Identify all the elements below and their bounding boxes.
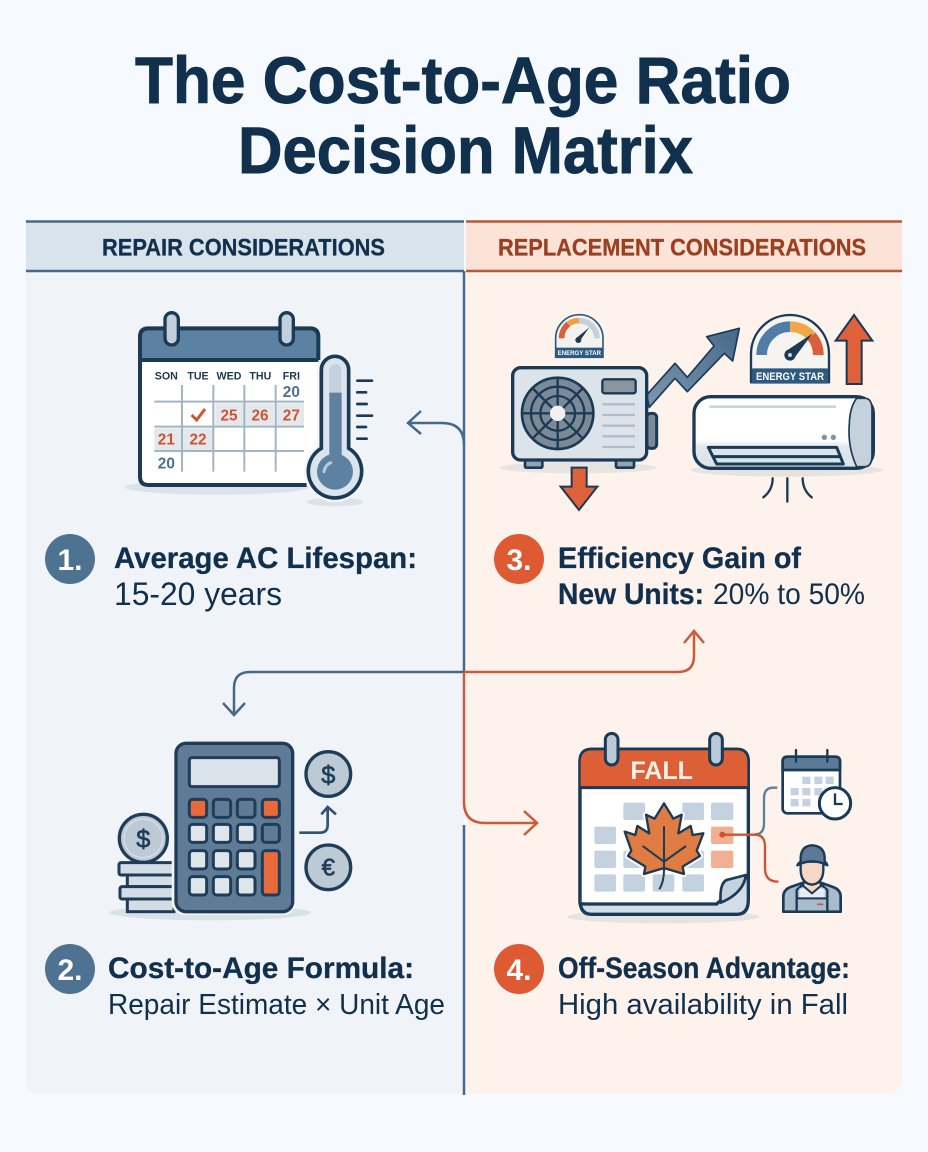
item 4: off-season advantage: 4. [506, 954, 532, 987]
icon: calculator and coins: $ [136, 825, 150, 853]
item 1: average AC lifespan: 1. [57, 544, 83, 577]
title: Decision Matrix [238, 113, 693, 187]
icon: calculator and coins: € [322, 855, 335, 882]
item 3: efficiency gain of new units: 20% to 50% [713, 578, 865, 611]
item 1: average AC lifespan: 15-20 years [114, 576, 282, 612]
panel: repair considerations [26, 222, 464, 1094]
item 3: efficiency gain of new units: 3. [506, 544, 532, 577]
arrow: to item 3 [464, 631, 704, 672]
icon: calendar and thermometer: THU [249, 371, 272, 383]
icon: AC units with efficiency gauges [500, 315, 883, 510]
icon: AC units with efficiency gauges: ENERGY STAR [558, 351, 602, 357]
icon: calendar and thermometer: WED [217, 371, 242, 383]
title: The Cost-to-Age Ratio [135, 43, 791, 117]
icon: calculator and coins: $ [321, 761, 335, 789]
item 2: cost-to-age formula: 2. [57, 954, 83, 987]
icon: calculator and coins [109, 740, 351, 920]
icon: calendar and thermometer: TUE [187, 371, 209, 383]
repair header [26, 222, 464, 271]
title [135, 43, 791, 187]
item 1: average AC lifespan: Average AC Lifespan: [114, 542, 417, 575]
icon: calendar and thermometer: FRI [283, 371, 300, 383]
icon: calendar and thermometer: SON [155, 371, 178, 383]
icon: calendar and thermometer: 20 [283, 384, 300, 401]
icon: calendar and thermometer: 25 [220, 407, 238, 424]
item 2: cost-to-age formula [45, 944, 445, 1021]
icon: fall calendar with technician [567, 733, 851, 923]
item 3: efficiency gain of new units: New Units: [558, 578, 704, 611]
repair header: REPAIR CONSIDERATIONS [102, 234, 385, 262]
icon: calendar and thermometer: 21 [158, 431, 175, 448]
arrow: to item 4 [464, 672, 537, 835]
icon: calendar and thermometer: 22 [189, 431, 207, 448]
item 2: cost-to-age formula: Cost-to-Age Formula: [108, 952, 414, 985]
item 4: off-season advantage: High availability in Fall [558, 989, 848, 1021]
icon: fall calendar with technician: FALL [630, 757, 693, 785]
item 4: off-season advantage: Off-Season Advantage: [558, 952, 850, 985]
item 4: off-season advantage [494, 944, 850, 1021]
item 3: efficiency gain of new units [494, 534, 865, 611]
icon: calendar and thermometer: 20 [158, 456, 175, 473]
divider and arrow: to item 1 [408, 271, 464, 1095]
icon: calendar and thermometer: 27 [283, 407, 300, 424]
replacement header: REPLACEMENT CONSIDERATIONS [498, 234, 866, 262]
item 1: average AC lifespan [45, 534, 417, 612]
panel: replacement considerations [466, 222, 902, 1094]
item 2: cost-to-age formula: Repair Estimate × Unit Age [108, 989, 445, 1021]
icon: calendar and thermometer [125, 313, 372, 506]
arrow: to item 2 [223, 672, 464, 715]
icon: AC units with efficiency gauges: ENERGY STAR [756, 371, 824, 383]
item 3: efficiency gain of new units: Efficiency Gain of [558, 542, 802, 575]
replacement header [466, 222, 902, 271]
icon: calendar and thermometer: 26 [251, 407, 269, 424]
